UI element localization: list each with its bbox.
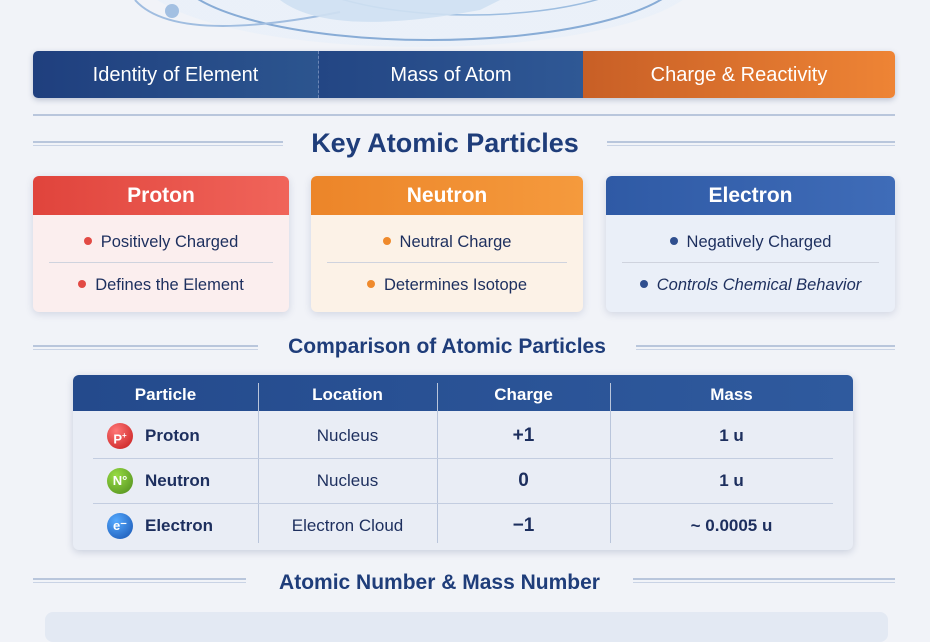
row: electron — [107, 513, 772, 539]
row: electron: −1 — [513, 515, 534, 536]
tab: mass — [318, 51, 583, 98]
table header: Particle — [135, 385, 196, 404]
row: electron: e⁻ — [113, 518, 127, 533]
heading: atomic number: Atomic Number & Mass Number — [279, 571, 600, 594]
card: neutron: Neutron — [407, 184, 487, 207]
tab: identity: Identity of Element — [93, 64, 258, 86]
card: neutron — [311, 176, 583, 312]
row: electron: Electron — [145, 516, 213, 535]
heading: comparison: Comparison of Atomic Particles — [288, 335, 606, 358]
bottom panel — [45, 612, 888, 642]
row: neutron: Nucleus — [317, 471, 378, 490]
row: neutron: 1 u — [719, 471, 744, 490]
table header: Location — [312, 385, 383, 404]
tab: charge — [583, 51, 895, 98]
card: proton: Defines the Element — [95, 276, 244, 294]
card: electron: Negatively Charged — [687, 233, 831, 251]
row: neutron: 0 — [518, 470, 529, 491]
tab bar — [33, 51, 895, 98]
row: proton: 1 u — [719, 426, 744, 445]
tab: charge: Charge & Reactivity — [651, 64, 827, 86]
card: electron: Controls Chemical Behavior — [657, 276, 861, 294]
row: electron: Electron Cloud — [292, 516, 403, 535]
card: electron: Electron — [708, 184, 793, 207]
row: neutron: Neutron — [145, 471, 210, 490]
card: neutron: Neutral Charge — [400, 233, 511, 251]
tab: identity — [33, 51, 318, 98]
row: proton — [107, 423, 744, 449]
row: proton: +1 — [513, 425, 534, 446]
row: proton: Proton — [145, 426, 200, 445]
row: proton: Nucleus — [317, 426, 378, 445]
row: proton: P+ — [113, 431, 127, 446]
table header: Mass — [710, 385, 753, 404]
card: electron — [606, 176, 895, 312]
atom illustration — [134, 0, 662, 41]
row: neutron: N° — [113, 473, 127, 488]
card: proton: Positively Charged — [101, 233, 238, 251]
row: electron: ~ 0.0005 u — [691, 516, 772, 535]
table header: Charge — [494, 385, 553, 404]
heading: key atomic particles: Key Atomic Particles — [311, 128, 579, 158]
row: neutron — [107, 468, 744, 494]
comparison table — [73, 375, 853, 550]
card: neutron: Determines Isotope — [384, 276, 527, 294]
table header — [73, 375, 853, 411]
card: proton — [33, 176, 289, 312]
card: proton: Proton — [127, 184, 195, 207]
tab: mass: Mass of Atom — [390, 64, 512, 86]
